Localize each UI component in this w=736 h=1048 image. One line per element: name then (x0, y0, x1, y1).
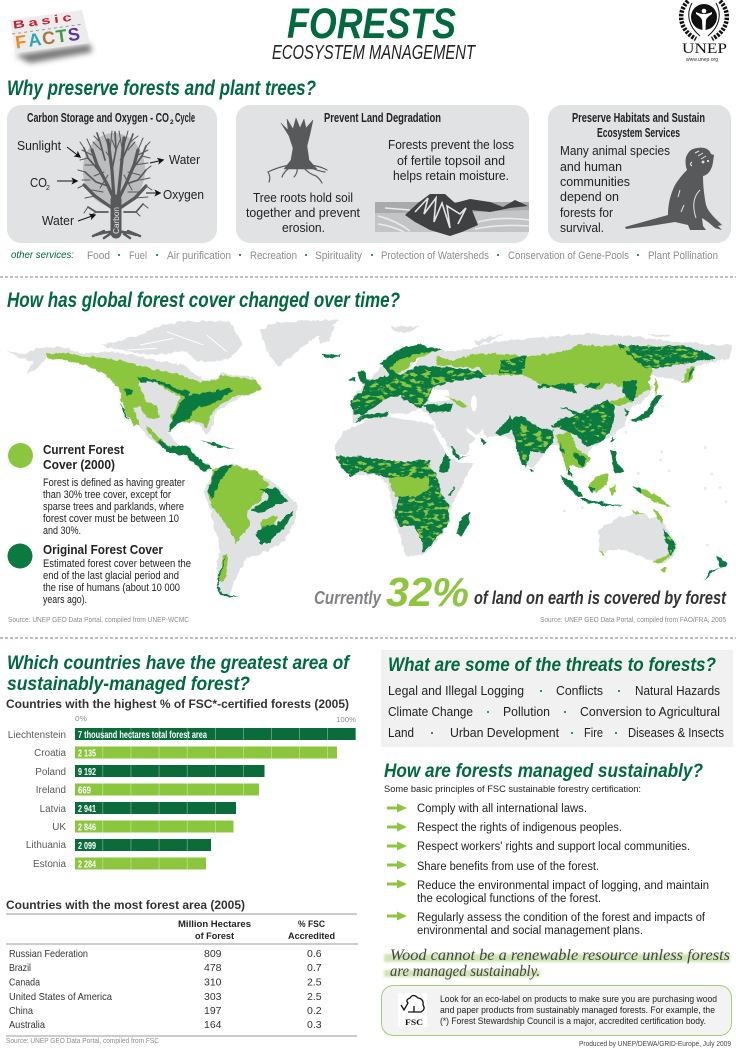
panel: carbon storage and oxygen cycle: Carbon Storage and Oxygen - CO (27, 111, 169, 125)
bar: Lithuania (26, 839, 211, 852)
icon: tree roots (268, 118, 327, 183)
panel: preserve habitats: Ecosystem Services (597, 126, 680, 140)
legend: original forest cover: the rise of humans (about 10 000 (43, 582, 180, 594)
text: tree roots: together and prevent (246, 205, 360, 220)
badge: Basic Facts: Basic (12, 10, 76, 31)
table: most forest area: Countries with the most forest area (2005) (6, 898, 245, 912)
text: principles intro: Some basic principles of FSC sustainable forestry certification: (384, 784, 641, 795)
list: principles: Share benefits from use of the forest. (417, 861, 599, 873)
legend: current forest cover: sparse trees and parklands, where (43, 501, 184, 513)
text: tree roots: Tree roots hold soil (253, 190, 353, 205)
table: most forest area: Source: UNEP GEO Data Portal, compiled from FSC (6, 1038, 159, 1045)
panel: carbon storage and oxygen cycle: 2 (170, 119, 174, 126)
bar: Latvia: 2 941 (78, 804, 96, 815)
bar: Ireland: 669 (78, 786, 91, 796)
table: most forest area: China (9, 1005, 33, 1017)
bar: Ireland (36, 784, 259, 796)
chart: highest percent FSC-certified: 0% (75, 714, 87, 723)
panel: threats to forests: Legal and Illegal Logging (388, 684, 524, 698)
bar: UK: UK (52, 822, 66, 833)
panel: FSC eco-label: (*) Forest Stewardship Council is a major, accredited certification body. (440, 1016, 706, 1027)
bar: Croatia: 2 135 (78, 748, 96, 760)
table: most forest area: 197 (204, 1005, 222, 1017)
table: most forest area: United States of America (9, 991, 112, 1003)
table: most forest area: Million Hectares (178, 919, 251, 930)
bar: Latvia: Latvia (40, 804, 66, 815)
map sources: Source: UNEP GEO Data Portal, compiled from UNEP-WCMC (8, 617, 189, 624)
logo: FSC (398, 993, 427, 1027)
table: most forest area: 310 (204, 976, 222, 988)
bar: Poland: 9 192 (78, 767, 96, 778)
legend: original forest cover (8, 542, 191, 606)
other services: Conservation of Gene-Pools (508, 250, 629, 262)
logo: UNEP: UNEP (682, 41, 727, 57)
map: ocean dots (563, 431, 727, 546)
legend: current forest cover: than 30% tree cover, except for (43, 489, 171, 501)
other services: Air purification (167, 250, 231, 262)
panel: threats to forests: Conversion to Agricultural (580, 705, 720, 719)
labels and arrows: CO (30, 176, 47, 190)
bar: Liechtenstein: Liechtenstein (8, 730, 66, 741)
bar: Croatia (34, 746, 337, 760)
legend: current forest cover: and 30%. (43, 525, 81, 537)
table: most forest area: Accredited (288, 931, 335, 942)
labels and arrows: Water (42, 214, 74, 228)
list: principles: Respect the rights of indigenous peoples. (417, 822, 622, 834)
legend: original forest cover: end of the last glacial period and (43, 570, 179, 582)
panel: prevent land degradation: Prevent Land Degradation (324, 111, 441, 125)
table: most forest area: 809 (204, 948, 222, 960)
bar: Lithuania: Lithuania (26, 840, 66, 851)
chart: highest percent FSC-certified: 100% (336, 715, 356, 724)
text: topsoil (388, 137, 514, 183)
badge: Basic Facts: A (27, 29, 43, 51)
callout: 32 percent: 32% (386, 569, 469, 615)
text: habitats: and human (560, 159, 622, 174)
panel: threats to forests: Urban Development (450, 726, 560, 740)
badge: Basic Facts: F (14, 31, 28, 53)
map sources: Source: UNEP GEO Data Portal, compiled from FAO/FRA, 2005 (540, 617, 726, 624)
map: Americas (7, 320, 340, 597)
chart: highest percent FSC-certified (6, 697, 356, 870)
panel: FSC eco-label: and paper products from sustainably managed forests. For example, the (440, 1005, 715, 1016)
panel: threats to forests: Diseases & Insects (628, 726, 724, 740)
heading: why preserve forests: Why preserve forests and plant trees? (7, 76, 316, 100)
badge: Basic Facts: S (67, 24, 81, 45)
icon: bare tree (78, 131, 152, 238)
handwritten note: are managed sustainably. (390, 963, 540, 980)
other services: Food (87, 250, 110, 262)
table: most forest area: % FSC (298, 919, 325, 930)
labels and arrows: Sunlight (17, 139, 61, 153)
text: habitats: forests for (560, 205, 614, 220)
handwritten note: Wood cannot be a renewable resource unless forests (390, 947, 730, 964)
table: most forest area: Australia (9, 1019, 45, 1031)
panel: threats to forests: Climate Change (388, 705, 473, 719)
bar: Liechtenstein: 7 thousand hectares total forest area (78, 730, 207, 741)
bar: Poland: Poland (35, 767, 66, 778)
world map (7, 320, 732, 597)
text: habitats: Many animal species (560, 143, 670, 158)
bar: Liechtenstein (8, 728, 356, 741)
labels and arrows (17, 139, 204, 228)
badge: Basic Facts: T (55, 26, 68, 47)
heading: which countries: Which countries have the greatest area of (7, 653, 351, 674)
other services: Spirituality (315, 250, 362, 262)
logo: FSC: FSC (405, 1017, 423, 1027)
callout: 32 percent (314, 569, 727, 615)
title (272, 0, 476, 64)
callout: 32 percent: Currently (314, 588, 382, 608)
table: most forest area: Canada (9, 976, 40, 988)
badge: Basic Facts (10, 9, 92, 63)
text: topsoil: of fertile topsoil and (397, 153, 505, 168)
other services: Plant Pollination (648, 250, 718, 262)
heading: which countries: sustainably-managed forest? (7, 674, 250, 695)
illustration: eroded mountain (375, 194, 529, 236)
other services: other services: (11, 249, 74, 261)
table: most forest area: Brazil (9, 962, 31, 974)
list: principles: environmental and social management plans. (417, 925, 643, 937)
handwritten note (384, 947, 730, 980)
panel: threats to forests: Fire (584, 726, 603, 740)
text: habitats: depend on (560, 189, 619, 204)
table: most forest area: 0.7 (307, 962, 322, 974)
badge: Basic Facts: C (41, 27, 56, 49)
map: Europe and Africa (318, 325, 732, 557)
table: most forest area: Russian Federation (9, 948, 88, 960)
heading: which countries (7, 653, 351, 695)
list: principles: Regularly assess the condition of the forest and impacts of (417, 912, 706, 924)
table: most forest area: 0.6 (307, 948, 322, 960)
labels and arrows: Water (169, 153, 200, 167)
logo: UNEP: www.unep.org (686, 57, 718, 63)
legend: current forest cover: forest cover must be between 10 (43, 513, 179, 525)
table: most forest area (6, 898, 358, 1045)
heading: managed sustainably: How are forests managed sustainably? (384, 760, 703, 782)
panel: preserve habitats (548, 105, 731, 243)
bar: Estonia (33, 858, 206, 870)
other services: Fuel (129, 250, 147, 262)
legend: original forest cover: Original Forest Cover (43, 542, 163, 557)
map: Asia and Oceania (510, 334, 732, 580)
panel: prevent land degradation (236, 105, 529, 243)
text: tree roots: erosion. (282, 220, 325, 235)
panel: threats to forests: Conflicts (556, 684, 603, 698)
bar: Ireland: Ireland (36, 785, 66, 796)
legend: original forest cover: Estimated forest cover between the (43, 558, 191, 570)
other services (11, 249, 718, 262)
bar: Croatia: Croatia (34, 748, 66, 759)
labels and arrows: 2 (46, 185, 50, 192)
text: habitats: communities (560, 174, 630, 189)
bar: UK: 2 846 (78, 822, 96, 834)
table: most forest area: 0.3 (307, 1019, 322, 1031)
legend: current forest cover (8, 442, 185, 537)
list: principles (387, 803, 709, 937)
list: principles: Respect workers' rights and support local communities. (417, 841, 690, 853)
table: most forest area: of Forest (195, 931, 235, 942)
table: most forest area: 0.2 (307, 1005, 322, 1017)
panel: carbon storage and oxygen cycle (7, 105, 217, 243)
list: principles: Reduce the environmental impact of logging, and maintain (417, 880, 709, 892)
other services: Protection of Watersheds (381, 250, 489, 262)
map sources (8, 617, 726, 624)
panel: threats to forests: Natural Hazards (635, 684, 720, 698)
heading: global forest cover: How has global forest cover changed over time? (7, 288, 400, 312)
text: tree roots (246, 190, 360, 235)
text: habitats (560, 143, 670, 235)
other services: Recreation (250, 250, 297, 262)
icon: monkey (625, 148, 722, 230)
text: habitats: survival. (560, 220, 604, 235)
table: most forest area: 2.5 (307, 991, 322, 1003)
legend: current forest cover: Forest is defined as having greater (43, 477, 185, 489)
labels and arrows: Oxygen (163, 188, 204, 202)
logo: UNEP (681, 1, 727, 63)
bar: Latvia (40, 802, 236, 815)
title: ECOSYSTEM MANAGEMENT (272, 42, 476, 64)
chart: highest percent FSC-certified: Countries with the highest % of FSC*-certified forests (2005) (6, 697, 349, 711)
title: FORESTS (287, 0, 456, 48)
text: topsoil: Forests prevent the loss (388, 137, 514, 152)
bar: Estonia: Estonia (33, 859, 66, 870)
panel: carbon storage and oxygen cycle: Cycle (175, 111, 195, 125)
bar: UK (52, 820, 234, 834)
panel: threats to forests (381, 650, 733, 747)
legend: original forest cover: years ago). (43, 594, 87, 606)
table: most forest area: 478 (204, 962, 222, 974)
legend: current forest cover: Cover (2000) (43, 457, 115, 472)
panel: carbon storage and oxygen cycle: Carbon (112, 207, 121, 234)
table: most forest area: 2.5 (307, 976, 322, 988)
panel: threats to forests: Pollution (503, 705, 550, 719)
table: most forest area: 164 (204, 1019, 222, 1031)
list: principles: Comply with all international laws. (417, 803, 587, 815)
bar: Estonia: 2 284 (78, 860, 96, 870)
list: principles: the ecological functions of the forest. (417, 893, 601, 905)
legend: current forest cover: Current Forest (43, 442, 125, 457)
bar: Poland (35, 765, 264, 778)
text: topsoil: helps retain moisture. (393, 168, 509, 183)
panel: threats to forests: Land (388, 726, 414, 740)
table: most forest area: 303 (204, 991, 222, 1003)
bar: Lithuania: 2 099 (78, 841, 96, 852)
panel: FSC eco-label (382, 986, 732, 1036)
